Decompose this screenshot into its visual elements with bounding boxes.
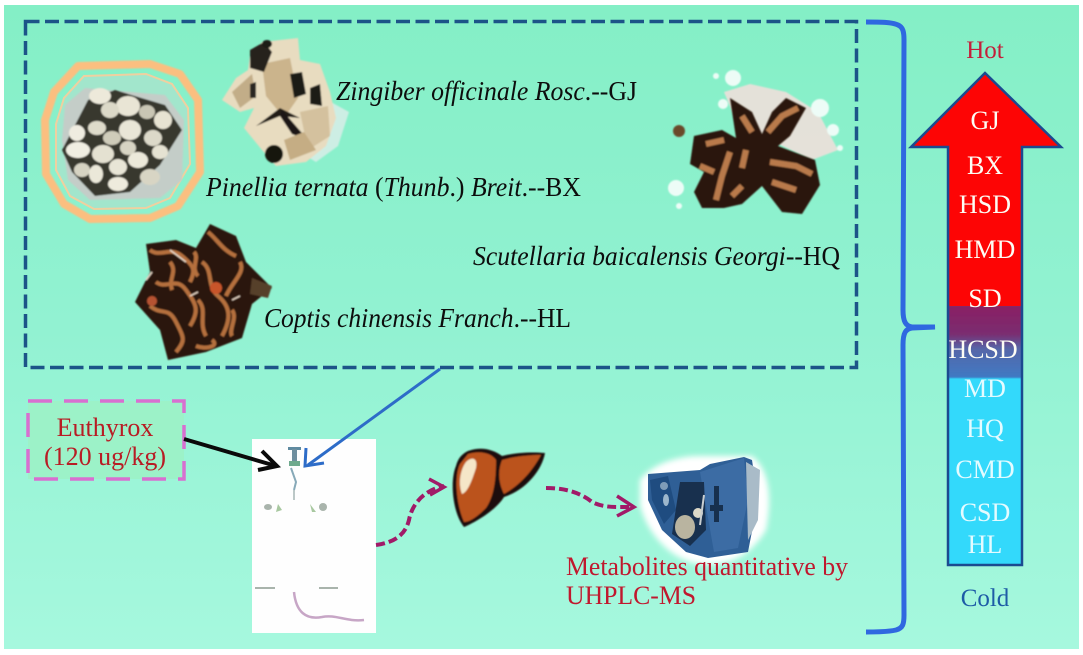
thermometer arrow bbox=[911, 73, 1061, 565]
label: Coptis: Coptis chinensis Franch.--HL bbox=[264, 303, 571, 333]
arrow item labels: CMD bbox=[955, 455, 1015, 484]
icon: scutellaria herb bbox=[668, 70, 843, 214]
arrow: card to liver bbox=[376, 479, 444, 545]
label: Metabolites quantitative by UHPLC-MS: UHPLC-MS bbox=[566, 581, 696, 610]
label: Pinellia: Pinellia ternata (Thunb.) Breit.--BX bbox=[205, 172, 581, 202]
icon: intestine curve bbox=[294, 592, 364, 620]
icon: pinellia herb in orange ring bbox=[45, 64, 200, 219]
arrow item labels: HSD bbox=[959, 190, 1011, 219]
Euthyrox label: Euthyrox bbox=[57, 413, 153, 442]
panel: herbs dashed box bbox=[26, 22, 856, 368]
arrow mid band bbox=[948, 305, 1022, 378]
arrow: liver to machine bbox=[546, 488, 634, 516]
dose label: (120 ug/kg) bbox=[44, 442, 166, 471]
bracket bbox=[866, 22, 935, 632]
Euthyrox dashed box bbox=[28, 401, 184, 479]
arrow outline bbox=[911, 73, 1061, 565]
panel: mouse dosing white card bbox=[252, 439, 376, 633]
arrow item labels: GJ bbox=[971, 106, 999, 135]
arrow item labels: HCSD bbox=[948, 335, 1018, 364]
arrow item labels bbox=[948, 106, 1018, 559]
label: Scutellaria: Scutellaria baicalensis Georgi--HQ bbox=[473, 241, 840, 271]
label: Metabolites quantitative by UHPLC-MS bbox=[566, 552, 848, 610]
label: Hot: Hot bbox=[966, 37, 1004, 64]
icon: ginger herb bbox=[222, 38, 349, 166]
arrow item labels: CSD bbox=[960, 498, 1010, 527]
arrow: Euthyrox to card bbox=[184, 439, 277, 470]
arrow hot section bbox=[911, 73, 1061, 306]
arrow cold section bbox=[948, 376, 1022, 565]
label: Metabolites quantitative by UHPLC-MS: Metabolites quantitative by bbox=[566, 552, 848, 581]
icon: liver bbox=[453, 449, 545, 527]
icon: small mice bbox=[255, 503, 338, 589]
icon: UHPLC-MS machine bbox=[640, 456, 769, 564]
arrow: herbs to card bbox=[305, 369, 440, 466]
icon: coptis herb bbox=[135, 224, 272, 360]
arrow item labels: HL bbox=[968, 530, 1002, 559]
arrow item labels: MD bbox=[964, 374, 1006, 403]
arrow item labels: HQ bbox=[966, 414, 1004, 443]
arrow item labels: HMD bbox=[955, 235, 1015, 264]
icon: syringe bbox=[288, 447, 301, 500]
label: Zingiber: Zingiber officinale Rosc.--GJ bbox=[336, 76, 637, 106]
arrow item labels: BX bbox=[967, 151, 1003, 180]
arrow item labels: SD bbox=[968, 284, 1002, 313]
label: Cold: Cold bbox=[961, 585, 1010, 612]
